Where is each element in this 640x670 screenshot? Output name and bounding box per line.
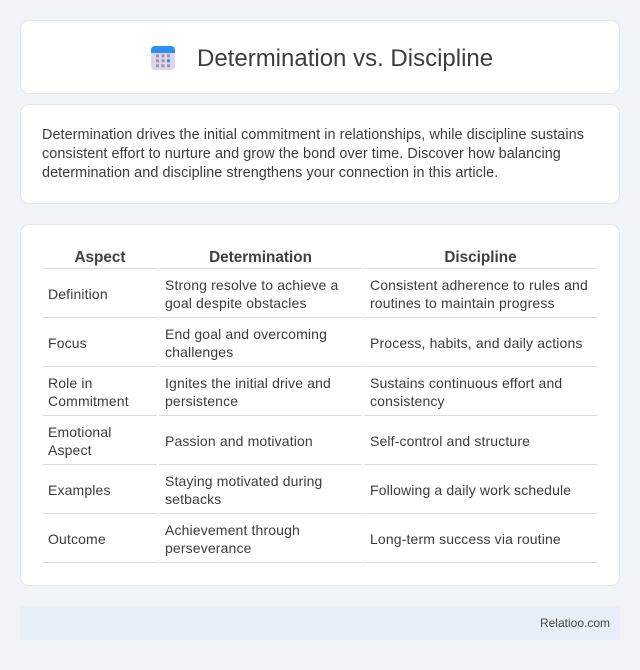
intro text xyxy=(42,127,584,181)
column heading: Discipline: Discipline xyxy=(444,249,517,266)
row: Focus: Process, habits, and daily actions xyxy=(370,335,583,351)
panel: title header xyxy=(20,20,620,94)
panel: introduction xyxy=(20,104,620,204)
column heading: Aspect: Aspect xyxy=(74,249,126,266)
row: Focus xyxy=(48,326,583,360)
row: Definition xyxy=(48,277,588,311)
row: Role in Commitment: consistency xyxy=(370,393,445,409)
intro text: consistent effort to nurture and grow the bond over time. Discover how balancing xyxy=(42,146,561,162)
row: Definition: Definition xyxy=(48,286,108,302)
row: Emotional Aspect: Emotional xyxy=(48,424,112,440)
row: Examples: Examples xyxy=(48,482,111,498)
intro text: determination and discipline strengthens your connection in this article. xyxy=(42,165,498,181)
intro text: Determination drives the initial commitment in relationships, while discipline sustains xyxy=(42,127,584,143)
row: Definition: Strong resolve to achieve a xyxy=(165,277,338,293)
row: Role in Commitment: Role in xyxy=(48,375,93,391)
row: Emotional Aspect xyxy=(48,424,530,458)
row: Role in Commitment xyxy=(48,375,562,409)
row: Outcome xyxy=(48,522,561,556)
row: Outcome: perseverance xyxy=(165,540,252,556)
footer bar xyxy=(20,606,620,640)
row: Outcome: Outcome xyxy=(48,531,106,547)
row: Role in Commitment: Sustains continuous effort and xyxy=(370,375,562,391)
row: Role in Commitment: Commitment xyxy=(48,393,129,409)
row: Role in Commitment: Ignites the initial drive and xyxy=(165,375,331,391)
title: Determination vs. Discipline xyxy=(197,45,493,72)
row: Examples: Staying motivated during xyxy=(165,473,322,489)
row: Examples: setbacks xyxy=(165,491,221,507)
row: Focus: End goal and overcoming xyxy=(165,326,327,342)
row: Examples: Following a daily work schedule xyxy=(370,482,571,498)
footer credit: Relatioo.com xyxy=(540,616,610,630)
row: Definition: goal despite obstacles xyxy=(165,295,307,311)
row: Role in Commitment: persistence xyxy=(165,393,238,409)
column heading: Determination: Determination xyxy=(209,249,312,266)
panel: comparison table xyxy=(20,224,620,586)
icon: calendar xyxy=(151,46,175,70)
row: Emotional Aspect: Passion and motivation xyxy=(165,433,313,449)
row: Outcome: Achievement through xyxy=(165,522,300,538)
row: Emotional Aspect: Self-control and structure xyxy=(370,433,530,449)
row: Focus: Focus xyxy=(48,335,87,351)
row: Emotional Aspect: Aspect xyxy=(48,442,92,458)
row: Outcome: Long-term success via routine xyxy=(370,531,561,547)
row: Definition: routines to maintain progress xyxy=(370,295,555,311)
row: Focus: challenges xyxy=(165,344,233,360)
row: Examples xyxy=(48,473,571,507)
row: Definition: Consistent adherence to rules and xyxy=(370,277,588,293)
